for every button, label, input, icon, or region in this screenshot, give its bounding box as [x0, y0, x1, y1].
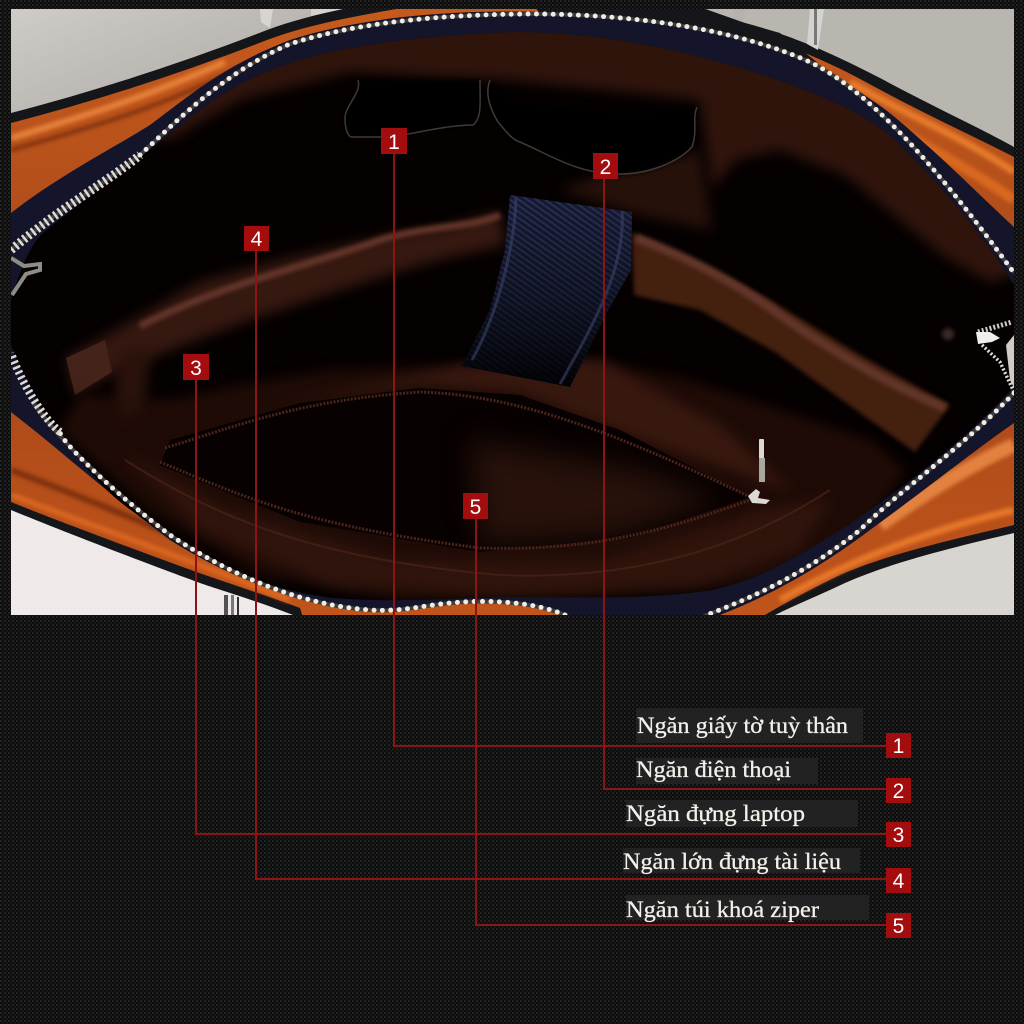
- fabric: right laptop sleeve edge: [632, 232, 950, 452]
- icon: metal handle fittings: [224, 9, 273, 615]
- icon: left zipper clasp: [11, 258, 40, 295]
- icon: right handle fitting: [807, 9, 824, 50]
- legend row 5: 5: [893, 915, 904, 938]
- fabric: left laptop sleeve edge: [66, 212, 505, 395]
- bag black edge: [0, 0, 1024, 640]
- bag interior lining: [11, 32, 1014, 600]
- legend row 1: [636, 708, 911, 758]
- legend row 5: Ngăn túi khoá ziper: [626, 897, 819, 922]
- icon: document pocket 1: [345, 80, 480, 137]
- legend row 4: [623, 848, 911, 893]
- marker 2 on photo: [593, 153, 618, 179]
- callout lines connecting markers to labels: [196, 154, 887, 925]
- icon: pocket zip pull: [748, 439, 770, 504]
- legend row 2: Ngăn điện thoại: [636, 757, 791, 782]
- legend row 2: [636, 757, 911, 803]
- black top rim over the trim on the right: [536, 9, 818, 63]
- legend row 4: 4: [893, 870, 905, 893]
- zipper teeth: [11, 14, 1014, 616]
- panel: bag interior photo: [0, 0, 1024, 640]
- marker 5 on photo: [463, 493, 488, 519]
- marker 4 on photo: 4: [251, 228, 263, 251]
- marker 2 on photo: 2: [600, 156, 611, 179]
- zipper stitching on pocket: [125, 392, 830, 576]
- fabric: lower pocket panel: [60, 350, 905, 600]
- legend row 2: 2: [893, 780, 904, 803]
- orange leather trim: [0, 5, 1024, 640]
- legend row 4: Ngăn lớn đựng tài liệu: [623, 849, 842, 874]
- legend row 1: Ngăn giấy tờ tuỳ thân: [637, 713, 849, 738]
- legend row 5: [626, 895, 911, 938]
- marker 1 on photo: 1: [388, 131, 400, 154]
- marker 5 on photo: 5: [470, 496, 481, 519]
- legend row 3: [626, 800, 911, 847]
- navy zipper tape: [0, 12, 1024, 640]
- legend row 3: Ngăn đựng laptop: [626, 801, 805, 826]
- legend row 3: 3: [893, 824, 904, 847]
- navy strap: [462, 195, 632, 387]
- legend row 1: 1: [893, 735, 904, 758]
- marker 1 on photo: [381, 128, 407, 154]
- upper lining band: [130, 15, 1024, 282]
- marker 4 on photo: [244, 226, 269, 251]
- icon: phone pocket 2: [488, 80, 697, 174]
- icon: right zipper clasp: [942, 322, 1014, 392]
- marker 3 on photo: 3: [190, 357, 202, 380]
- marker 3 on photo: [183, 354, 209, 380]
